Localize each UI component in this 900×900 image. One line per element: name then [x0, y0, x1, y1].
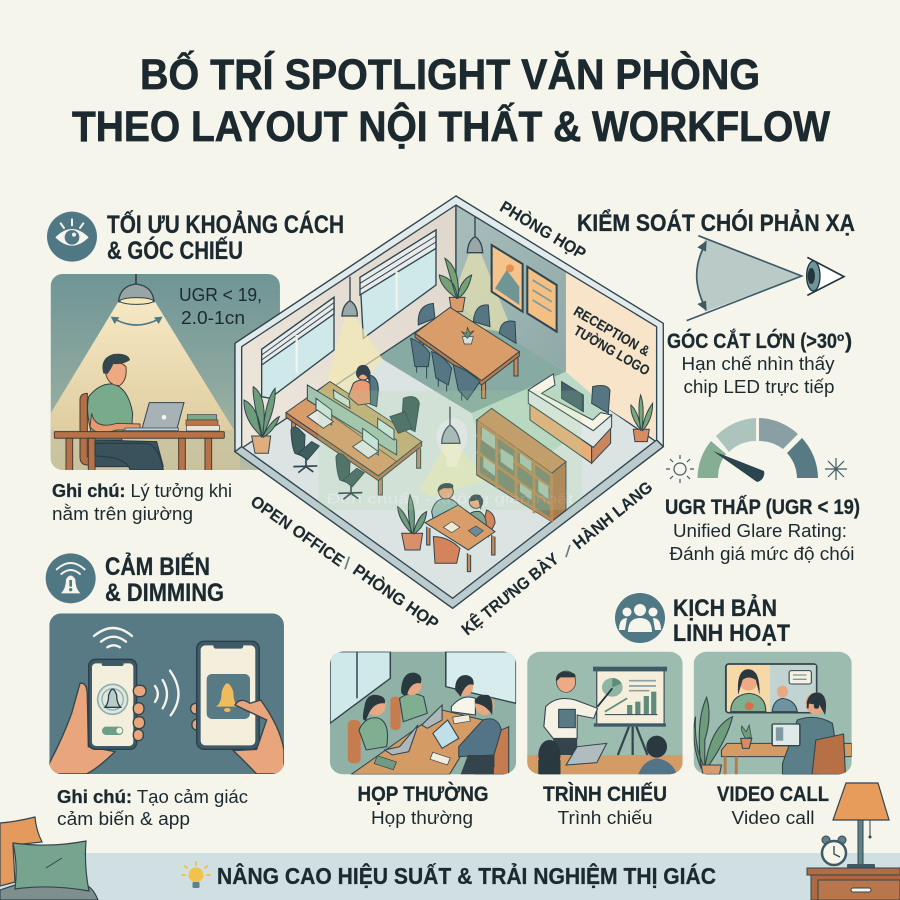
meeting rug — [378, 305, 566, 413]
footer text: NÂNG CAO HIỆU SUẤT & TRẢI NGHIỆM THỊ GIÁC — [217, 861, 716, 889]
books — [186, 415, 219, 431]
heading: tối ưu khoảng cách: TỐI ƯU KHOẢNG CÁCH — [107, 209, 344, 239]
labels: scenarios: Trình chiếu — [558, 807, 652, 828]
pendant left — [342, 277, 357, 316]
meeting front chairs — [411, 338, 480, 401]
picture right — [527, 267, 557, 332]
heading: kiểm soát chói: KIỂM SOÁT CHÓI PHẢN XẠ — [577, 208, 855, 237]
labels: scenarios: TRÌNH CHIẾU — [543, 781, 667, 806]
footer banner — [0, 853, 900, 900]
note: ghi chú 2 — [57, 787, 248, 829]
text: góc cắt lớn: Hạn chế nhìn thấy — [682, 353, 835, 374]
text: ugr thấp: UGR THẤP (UGR < 19) — [665, 494, 860, 519]
panel text: UGR value: UGR < 19, — [179, 284, 262, 305]
light cone right pendant — [443, 253, 513, 333]
heading: tối ưu khoảng cách — [107, 209, 344, 265]
sun icon — [666, 455, 694, 483]
right phone — [191, 641, 259, 749]
left window — [262, 297, 334, 398]
left fingers — [133, 685, 146, 741]
light cone center pendant — [420, 443, 487, 497]
floor — [235, 303, 663, 608]
heading: tối ưu khoảng cách: & GÓC CHIẾU — [107, 235, 243, 265]
right window — [360, 230, 436, 338]
panel: trình chiếu — [527, 652, 683, 777]
label: reception: TƯỜNG LOGO — [571, 321, 653, 378]
alarm clock — [822, 836, 846, 865]
heading: kịch bản — [673, 593, 790, 647]
heading: cảm biến — [105, 551, 224, 607]
text: ugr thấp — [665, 494, 860, 564]
text: góc cắt lớn — [667, 328, 852, 397]
glare icon — [825, 458, 847, 480]
panel: lamp and desk illustration — [51, 274, 280, 472]
left wall — [235, 196, 456, 452]
text: góc cắt lớn: GÓC CẮT LỚN (>30 — [667, 328, 837, 353]
panel: họp thường — [330, 652, 516, 774]
laptops on desk — [307, 398, 394, 458]
plant right — [631, 395, 653, 442]
people at small table — [432, 483, 495, 537]
watermark: Đèn chuẩn - không gian nhất — [327, 490, 573, 506]
low front walls — [235, 440, 663, 608]
UGR gauge — [666, 418, 847, 483]
note: ghi chú 1: nằm trên giường — [52, 503, 193, 524]
note: ghi chú 2: Ghi chú: Tạo cảm giác — [57, 787, 248, 807]
text: góc cắt lớn: chip LED trực tiếp — [684, 376, 834, 397]
text: ugr thấp: Unified Glare Rating: — [673, 520, 847, 541]
plant bottom — [398, 495, 427, 550]
title — [72, 50, 830, 151]
note: ghi chú 2: cảm biến & app — [57, 809, 190, 829]
panel text: UGR value — [179, 284, 262, 328]
labels: scenarios: HỌP THƯỜNG — [358, 781, 488, 806]
left phone — [89, 659, 137, 749]
label: reception: RECEPTION & — [571, 303, 653, 359]
office person — [333, 365, 378, 408]
left hand — [49, 683, 115, 774]
meeting table — [415, 307, 519, 398]
icon: eye — [47, 212, 97, 262]
light cone left pendant — [325, 317, 383, 403]
label: phòng họp bottom: PHÒNG HỌP — [349, 560, 442, 633]
heading: cảm biến: & DIMMING — [105, 579, 224, 607]
wall caps — [235, 196, 663, 452]
right hand — [233, 700, 284, 774]
text: góc cắt lớn: o — [837, 330, 844, 344]
plant left — [244, 387, 279, 453]
pillows and sofa — [0, 817, 98, 900]
laptop — [125, 403, 184, 431]
label: hành lang: HÀNH LANG — [569, 477, 656, 553]
watermark — [318, 391, 582, 510]
note: ghi chú 1: Ghi chú: Lý tưởng khi — [52, 481, 232, 501]
heading: kịch bản: KỊCH BẢN — [673, 593, 777, 622]
signal waves — [155, 671, 178, 715]
meeting table back chairs — [418, 303, 516, 343]
table lamp — [833, 783, 889, 868]
needle — [713, 451, 764, 482]
person — [88, 354, 163, 467]
panel: video call — [694, 652, 852, 774]
icon: sensor bell — [46, 553, 96, 603]
label: open office: OPEN OFFICE — [247, 492, 348, 570]
wifi waves — [94, 628, 132, 647]
text: góc cắt lớn: ) — [845, 329, 852, 353]
pendant right — [467, 217, 483, 253]
label: phòng họp top: PHÒNG HỌP — [497, 197, 589, 263]
bookshelf — [477, 408, 566, 522]
light cone — [51, 302, 240, 470]
label: kệ trưng bày: KỆ TRƯNG BÀY — [458, 549, 563, 639]
labels: scenarios: Video call — [732, 807, 814, 828]
angle arrow — [111, 317, 163, 325]
icon: light bulb — [182, 862, 210, 888]
green floor zone — [472, 372, 610, 467]
reception desk — [528, 374, 612, 463]
plant on back wall — [439, 258, 472, 312]
picture left — [492, 245, 523, 312]
note: ghi chú 1 — [52, 481, 232, 524]
desk — [54, 432, 224, 472]
heading: cảm biến: CẢM BIẾN — [105, 551, 210, 581]
icon: people — [615, 593, 665, 643]
eye icon — [807, 257, 844, 295]
lamp — [119, 274, 154, 304]
title: THEO LAYOUT NỘI THẤT & WORKFLOW — [72, 102, 830, 151]
labels: scenarios: Họp thường — [371, 807, 473, 828]
labels: scenarios: VIDEO CALL — [717, 782, 829, 806]
right wall — [456, 205, 566, 372]
chair — [80, 392, 88, 466]
glare cutoff diagram — [687, 236, 844, 321]
heading: kịch bản: LINH HOẠT — [673, 620, 790, 647]
panel text: UGR value: 2.0-1cn — [181, 307, 245, 328]
labels: scenarios — [358, 781, 829, 828]
chairs around desk — [291, 397, 419, 499]
pendant center — [442, 407, 460, 443]
isometric office floorplan — [235, 196, 663, 639]
small table — [425, 505, 495, 572]
reception wall — [566, 272, 657, 440]
text: ugr thấp: Đánh giá mức độ chói — [670, 543, 854, 564]
title: BỐ TRÍ SPOTLIGHT VĂN PHÒNG — [140, 50, 760, 99]
panel: phones — [49, 613, 284, 774]
open office desk — [286, 382, 422, 495]
nightstand — [807, 868, 900, 900]
desk divider — [307, 385, 397, 455]
